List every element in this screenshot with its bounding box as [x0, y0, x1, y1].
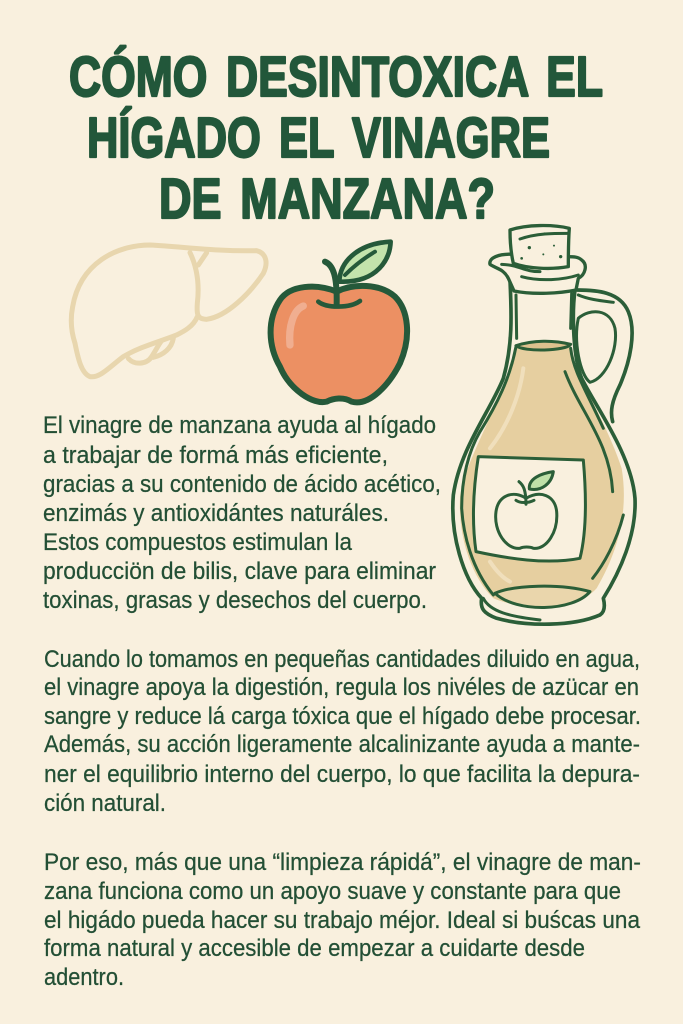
bottle body outline	[453, 280, 635, 624]
title: DE MANZANA?	[159, 167, 495, 231]
paragraph 2: ción natural.	[44, 790, 166, 817]
liquid highlight	[490, 368, 523, 582]
paragraph 3: el higádo pueda hacer su trabajo méjor. Ideal si buścas una	[44, 907, 640, 934]
paragraph 1: enzimás y antioxidántes naturáles.	[43, 500, 389, 527]
paragraph 1: gracias a su contenido de ácido acético,	[43, 471, 441, 498]
collar	[490, 254, 585, 293]
icon: vinegar bottle	[453, 226, 635, 624]
label apple	[496, 494, 557, 548]
title: HÍGADO EL VINAGRE	[87, 106, 550, 170]
inner glass lines	[462, 347, 516, 595]
paragraph 3	[44, 849, 641, 991]
bottle liquid	[460, 342, 624, 606]
icon: apple	[271, 242, 407, 402]
paragraph 1	[43, 412, 441, 614]
icon: liver outline	[71, 245, 266, 377]
label	[474, 457, 586, 561]
paragraph 3: forma natural y accesible de empezar a cuidarte desde	[44, 935, 585, 962]
paragraph 2: ner el equilibrio interno del cuerpo, lo que facilita la depura-	[44, 761, 640, 788]
paragraph 1: toxinas, grasas y desechos del cuerpo.	[43, 587, 427, 614]
paragraph 1: Estos compuestos estimulan la	[43, 529, 352, 556]
cork	[510, 226, 569, 268]
liquid surface	[516, 341, 571, 350]
paragraph 3: zana funciona como un apoyo suave y constante para que	[44, 878, 621, 905]
title	[69, 45, 603, 231]
paragraph 1: El vinagre de manzana ayuda al hígado	[43, 412, 436, 439]
paragraph 3: adentro.	[44, 964, 124, 991]
handle	[577, 290, 632, 422]
bottle base ellipse	[495, 586, 590, 607]
paragraph 1: producciön de bilis, clave para eliminar	[43, 558, 436, 585]
paragraph 1: a trabajar de formá más eficiente,	[43, 442, 388, 469]
paragraph 3: Por eso, más que una “limpieza rápidá”, el vinagre de man-	[44, 849, 641, 876]
paragraph 2	[44, 646, 641, 817]
